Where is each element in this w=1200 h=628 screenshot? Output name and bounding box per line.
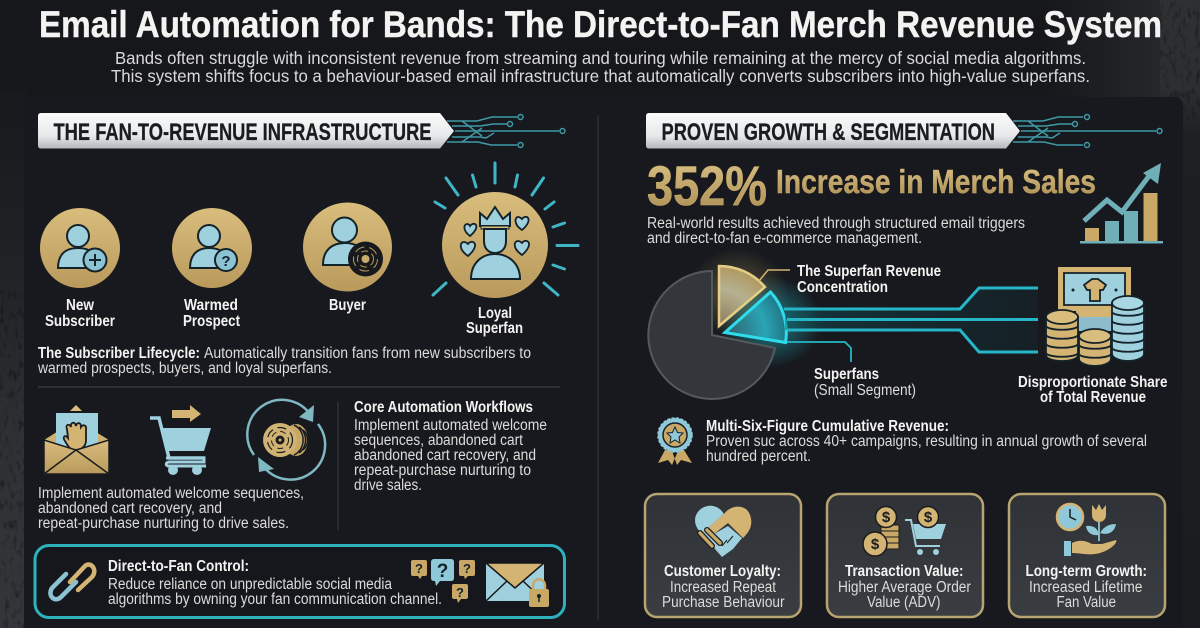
text: multi-six-figure cumulative revenue bbox=[706, 418, 1147, 465]
icon: coins and cart: $ bbox=[871, 536, 880, 553]
card: transaction value bbox=[827, 494, 983, 617]
icon: new subscriber bbox=[40, 208, 120, 288]
icon: loyal superfan bbox=[433, 163, 578, 298]
label: warmed prospect: Warmed bbox=[184, 297, 238, 314]
label: loyal superfan: Loyal bbox=[478, 305, 512, 322]
icon: welcome email bbox=[44, 405, 109, 474]
intro text: Bands often struggle with inconsistent revenue from streaming and touring while remaining at the mercy of social media algorithms. bbox=[115, 48, 1086, 68]
heading: proven growth and segmentation bbox=[646, 113, 1162, 148]
card: customer loyalty bbox=[645, 494, 801, 617]
text: customer loyalty: Increased Repeat bbox=[670, 579, 777, 596]
label: loyal superfan: Superfan bbox=[466, 320, 523, 337]
card: long-term growth bbox=[1009, 494, 1165, 617]
icon: handshake heart bbox=[695, 506, 751, 557]
callout: direct-to-fan control bbox=[35, 546, 564, 618]
text: customer loyalty bbox=[662, 563, 784, 611]
label: new subscriber: Subscriber bbox=[45, 313, 115, 330]
callout: superfans small segment: Superfans bbox=[814, 366, 879, 383]
text: core automation workflows: Core Automation Workflows bbox=[354, 399, 533, 416]
text: long-term growth: Increased Lifetime bbox=[1029, 579, 1142, 596]
icon: merch money and coins bbox=[1046, 267, 1144, 366]
label: warmed prospect: Prospect bbox=[183, 313, 241, 330]
text: real-world results: and direct-to-fan e-commerce management. bbox=[647, 230, 922, 247]
icon: chain link bbox=[50, 565, 94, 599]
connector: revenue flow lines bbox=[784, 288, 1038, 352]
icon: clock and plant in hand bbox=[1057, 504, 1116, 556]
panel: proven growth and segmentation bbox=[645, 113, 1168, 617]
icon: coins and cart bbox=[863, 506, 946, 556]
icon: growth chart bbox=[1080, 163, 1163, 244]
chart: superfan revenue pie bbox=[648, 248, 822, 399]
text: automation sequences: Implement automated welcome sequences, bbox=[38, 485, 304, 502]
icon: repeat-purchase cycle bbox=[247, 400, 325, 480]
callout: superfan revenue concentration bbox=[759, 263, 941, 296]
text: the subscriber lifecycle bbox=[37, 345, 531, 377]
text: direct-to-fan control bbox=[108, 558, 442, 608]
text: customer loyalty: Customer Loyalty: bbox=[664, 563, 781, 580]
text: the subscriber lifecycle: warmed prospects, buyers, and loyal superfans. bbox=[37, 360, 332, 377]
text: transaction value: Higher Average Order bbox=[838, 579, 971, 596]
text: the subscriber lifecycle: The Subscriber Lifecycle: bbox=[38, 345, 200, 362]
icon: question bubbles: ? bbox=[437, 561, 448, 582]
text: automation sequences: abandoned cart recovery, and bbox=[38, 500, 222, 517]
text: real-world results: Real-world results achieved through structured email triggers bbox=[647, 215, 1025, 232]
label: disproportionate share: Disproportionate Share bbox=[1018, 374, 1168, 391]
text: multi-six-figure cumulative revenue: Proven suc across 40+ campaigns, resulting in annual growth of several bbox=[706, 433, 1147, 450]
text: the subscriber lifecycle: Automatically transition fans from new subscribers to bbox=[204, 345, 531, 362]
icon: warmed prospect bbox=[172, 208, 252, 288]
text: direct-to-fan control: Reduce reliance on unpredictable social media bbox=[108, 576, 392, 593]
text: customer loyalty: Purchase Behaviour bbox=[662, 594, 784, 611]
text: automation sequences: repeat-purchase nurturing to drive sales. bbox=[38, 515, 289, 532]
text: core automation workflows: repeat-purchase nurturing to bbox=[354, 462, 531, 479]
text: long-term growth: Fan Value bbox=[1056, 594, 1116, 611]
label: new subscriber: New bbox=[66, 297, 94, 314]
text: core automation workflows bbox=[354, 399, 547, 494]
intro text: This system shifts focus to a behaviour-based email infrastructure that automatically converts subscribers into high-value superfans. bbox=[111, 66, 1090, 86]
text: core automation workflows: sequences, abandoned cart bbox=[354, 432, 524, 449]
stat: 352% increase in merch sales bbox=[647, 154, 1096, 217]
text: core automation workflows: Implement automated welcome bbox=[354, 417, 547, 434]
heading: the fan-to-revenue infrastructure: THE FAN-TO-REVENUE INFRASTRUCTURE bbox=[54, 119, 432, 146]
text: core automation workflows: drive sales. bbox=[354, 477, 422, 494]
label: disproportionate share bbox=[1018, 374, 1168, 406]
label: warmed prospect bbox=[183, 297, 241, 330]
text: real-world results bbox=[647, 215, 1025, 247]
icon: coins and cart: $ bbox=[924, 509, 933, 526]
text: long-term growth: Long-term Growth: bbox=[1026, 563, 1147, 580]
heading: proven growth and segmentation: PROVEN GROWTH & SEGMENTATION bbox=[662, 119, 995, 146]
icon: question bubbles: ? bbox=[415, 561, 423, 576]
label: disproportionate share: of Total Revenue bbox=[1040, 389, 1146, 406]
icon: warmed prospect: ? bbox=[221, 253, 231, 270]
icon: abandoned cart bbox=[150, 405, 211, 475]
label: loyal superfan bbox=[466, 305, 523, 337]
text: core automation workflows: abandoned cart recovery, and bbox=[354, 447, 536, 464]
label: buyer: Buyer bbox=[329, 297, 366, 314]
text: automation sequences bbox=[38, 485, 304, 532]
callout: superfans small segment bbox=[787, 342, 916, 399]
intro text bbox=[111, 48, 1090, 86]
text: multi-six-figure cumulative revenue: Multi-Six-Figure Cumulative Revenue: bbox=[706, 418, 949, 435]
callout: superfan revenue concentration: The Superfan Revenue bbox=[797, 263, 941, 280]
icon: coins and cart: $ bbox=[882, 509, 891, 526]
text: transaction value: Transaction Value: bbox=[845, 563, 964, 580]
label: new subscriber bbox=[45, 297, 115, 330]
callout: superfans small segment: (Small Segment) bbox=[814, 382, 916, 399]
icon: award ribbon bbox=[658, 418, 692, 465]
text: transaction value bbox=[838, 563, 971, 611]
stat: 352% increase in merch sales: Increase in Merch Sales bbox=[776, 163, 1096, 200]
icon: question bubbles: ? bbox=[456, 585, 464, 600]
icon: question bubbles bbox=[411, 559, 475, 603]
text: transaction value: Value (ADV) bbox=[867, 594, 940, 611]
text: long-term growth bbox=[1026, 563, 1147, 611]
stat: 352% increase in merch sales: 352% bbox=[647, 154, 767, 217]
icon: question bubbles: ? bbox=[463, 561, 471, 576]
text: multi-six-figure cumulative revenue: hundred percent. bbox=[706, 448, 811, 465]
callout: superfan revenue concentration: Concentration bbox=[797, 279, 888, 296]
text: direct-to-fan control: Direct-to-Fan Control: bbox=[108, 558, 249, 575]
icon: buyer bbox=[303, 202, 392, 292]
panel: fan-to-revenue infrastructure bbox=[35, 113, 578, 618]
text: direct-to-fan control: algorithms by owning your fan communication channel. bbox=[108, 591, 442, 608]
icon: locked envelope bbox=[486, 563, 549, 607]
